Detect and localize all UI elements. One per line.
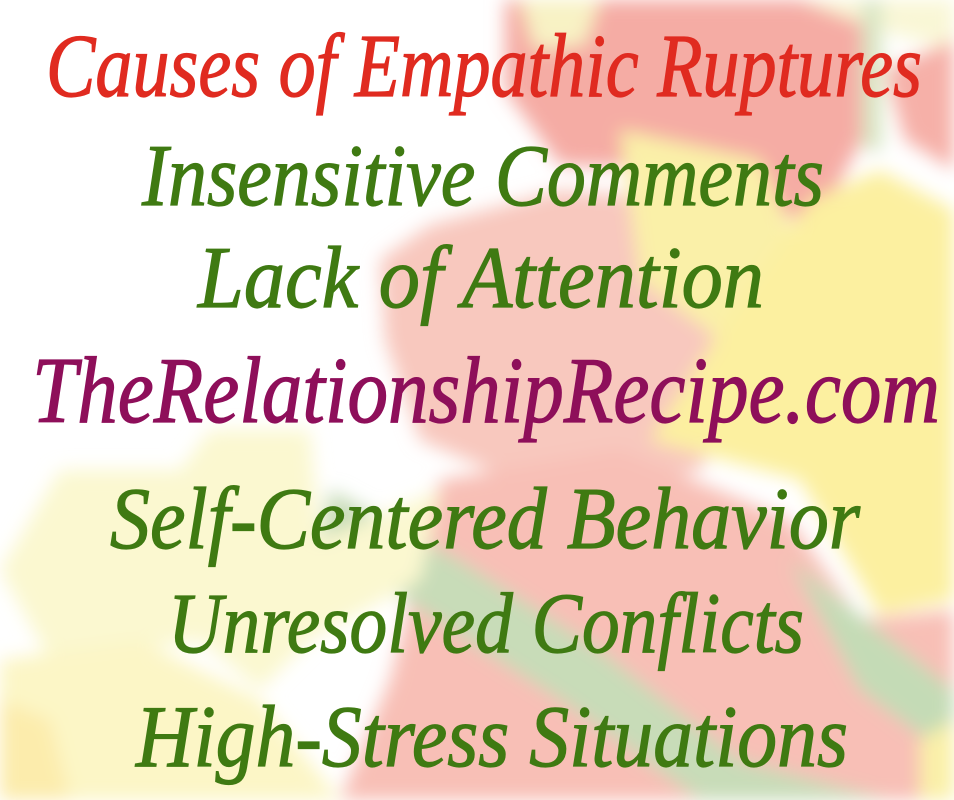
cause: insensitive comments: Insensitive Comments: [141, 128, 824, 225]
cause: self-centered behavior: Self-Centered Behavior: [110, 471, 861, 568]
cause: high-stress situations: High-Stress Situations: [135, 689, 848, 786]
cause: unresolved conflicts: Unresolved Conflicts: [168, 575, 804, 671]
cause: lack of attention: Lack of Attention: [196, 230, 764, 327]
